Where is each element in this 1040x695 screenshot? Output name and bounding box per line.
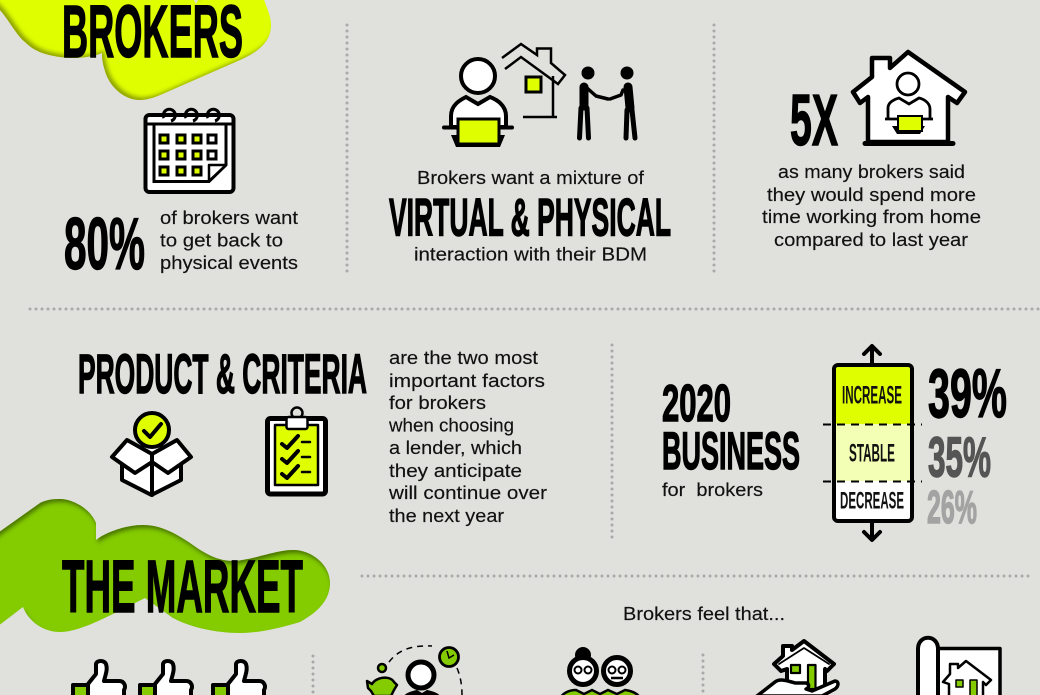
text: mixture of: Brokers want a mixture of: [417, 168, 645, 188]
stat: 26 percent: 26%: [927, 481, 977, 533]
text: important factors: will continue over: [388, 483, 547, 503]
text: interaction: interaction with their BDM: [414, 244, 647, 264]
chart: business change scale: DECREASE: [840, 488, 904, 514]
chart: business change scale: [823, 346, 922, 540]
text: VIRTUAL & PHYSICAL: [389, 188, 671, 248]
text: work from home: compared to last year: [774, 230, 968, 250]
text: important factors: when choosing: [388, 416, 514, 436]
icon: house blueprint: [918, 638, 1000, 695]
text: work from home: time working from home: [762, 207, 981, 227]
heading: 2020 business: [662, 375, 800, 481]
text: work from home: as many brokers said: [778, 162, 965, 182]
text: work from home: they would spend more: [767, 185, 976, 205]
text: important factors: [388, 348, 547, 526]
icon: box with check: [112, 413, 191, 495]
text: physical events: [160, 208, 298, 273]
text: brokers feel that: Brokers feel that...: [623, 604, 785, 624]
text: work from home: [762, 162, 981, 250]
icon: person with savings and time: [367, 646, 462, 695]
icon: elderly couple: [560, 647, 640, 695]
icon: two people shaking hands: [580, 66, 635, 138]
text: important factors: for brokers: [389, 393, 486, 413]
chart: business change scale: STABLE: [849, 440, 895, 468]
stat: 5X: 5X: [790, 81, 838, 161]
stat: 35 percent: 35%: [928, 426, 991, 490]
stat: 80 percent: 80%: [64, 204, 145, 285]
icon: three thumbs up: [73, 661, 265, 695]
text: THE MARKET: [62, 545, 303, 628]
icon: clipboard checklist: [268, 408, 326, 494]
text: important factors: important factors: [389, 371, 545, 391]
icon: person working from home: [853, 52, 965, 144]
text: important factors: the next year: [389, 506, 504, 526]
text: physical events: to get back to: [160, 230, 283, 250]
text: for brokers: for brokers: [662, 480, 763, 500]
blob: brokers heading background: [0, 0, 271, 100]
text: PRODUCT & CRITERIA: [78, 342, 367, 405]
heading: 2020 business: 2020: [662, 375, 731, 433]
text: important factors: a lender, which: [389, 438, 522, 458]
text: physical events: physical events: [160, 253, 298, 273]
icon: house outline: [502, 44, 565, 117]
text: important factors: are the two most: [389, 348, 538, 368]
heading: 2020 business: BUSINESS: [662, 422, 800, 481]
blob: the market heading background: [0, 499, 330, 655]
chart: business change scale: INCREASE: [842, 382, 902, 410]
icon: broker at laptop: [444, 59, 512, 147]
icon: hand holding house: [757, 641, 838, 695]
text: important factors: they anticipate: [389, 461, 522, 481]
text: physical events: of brokers want: [160, 208, 298, 228]
icon: calendar: [146, 109, 234, 192]
